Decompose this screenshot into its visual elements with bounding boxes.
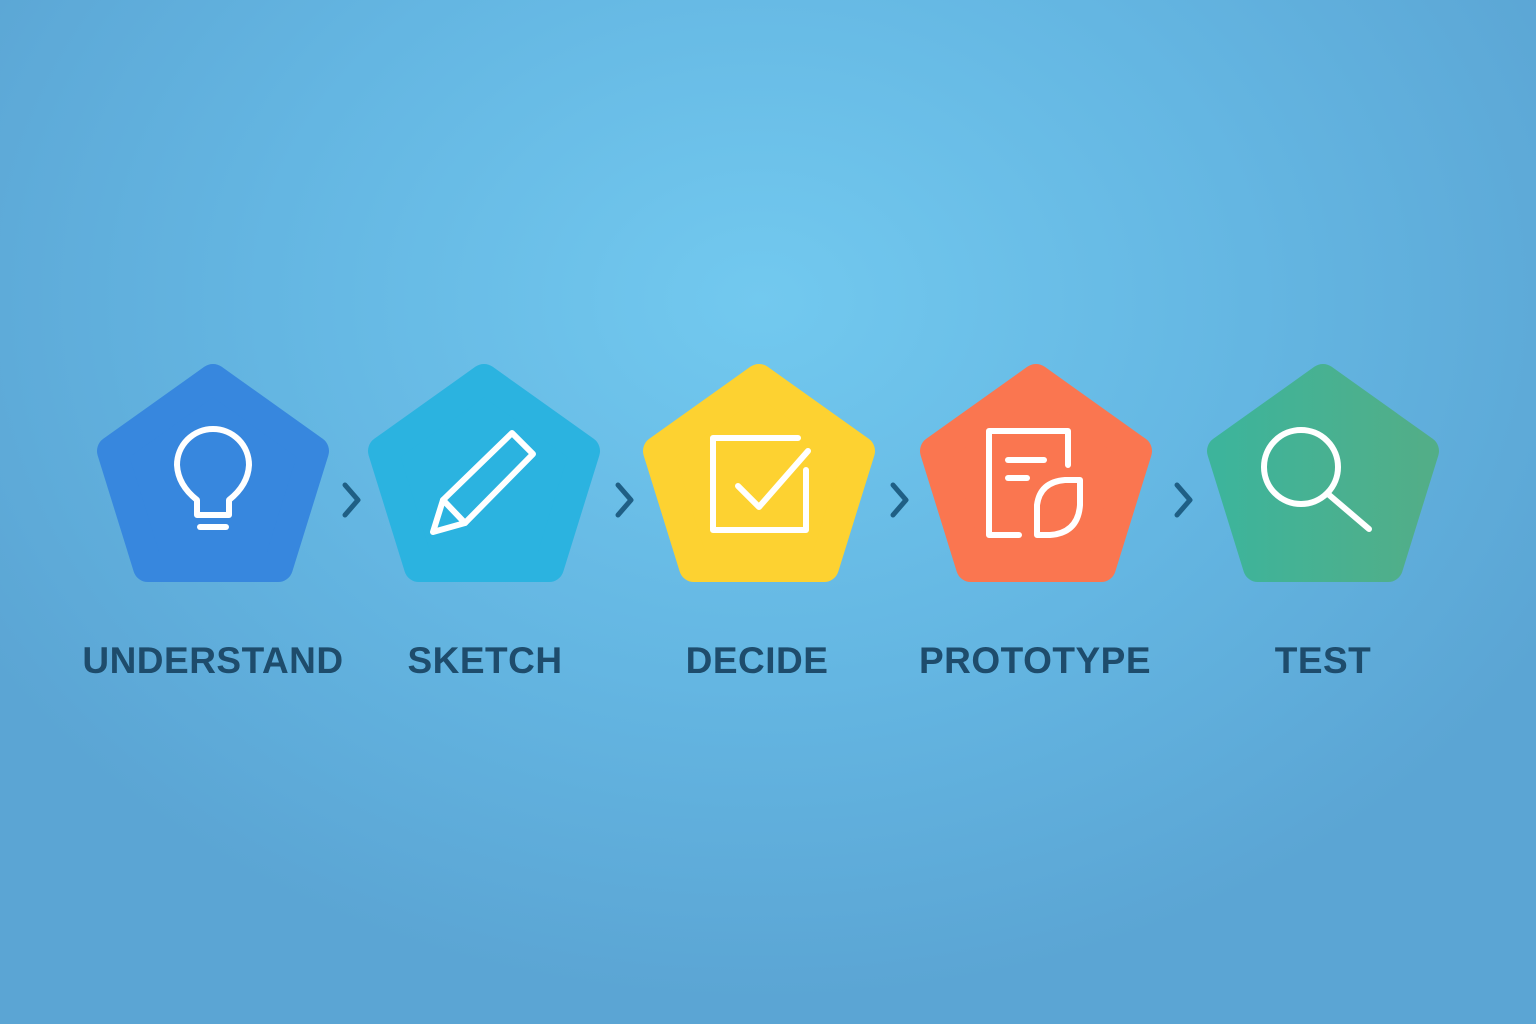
label: prototype: PROTOTYPE xyxy=(919,640,1151,681)
arrow 4 xyxy=(1177,485,1190,515)
icon: document with leaf xyxy=(989,431,1080,535)
step 4: prototype xyxy=(935,379,1137,567)
icon: magnifier xyxy=(1264,430,1369,529)
label: sketch: SKETCH xyxy=(407,640,563,681)
icon: light bulb xyxy=(177,429,249,527)
arrow 3 xyxy=(893,485,906,515)
label: decide: DECIDE xyxy=(686,640,828,681)
arrow 1 xyxy=(345,485,358,515)
icon: pencil xyxy=(433,433,533,532)
label: understand: UNDERSTAND xyxy=(82,640,344,681)
step 2: sketch xyxy=(383,379,585,567)
step 1: understand xyxy=(112,379,314,567)
icon: checkbox xyxy=(713,438,808,530)
label: test: TEST xyxy=(1275,640,1371,681)
step 3: decide xyxy=(658,379,860,567)
step 5: test xyxy=(1222,379,1424,567)
arrow 2 xyxy=(618,485,631,515)
